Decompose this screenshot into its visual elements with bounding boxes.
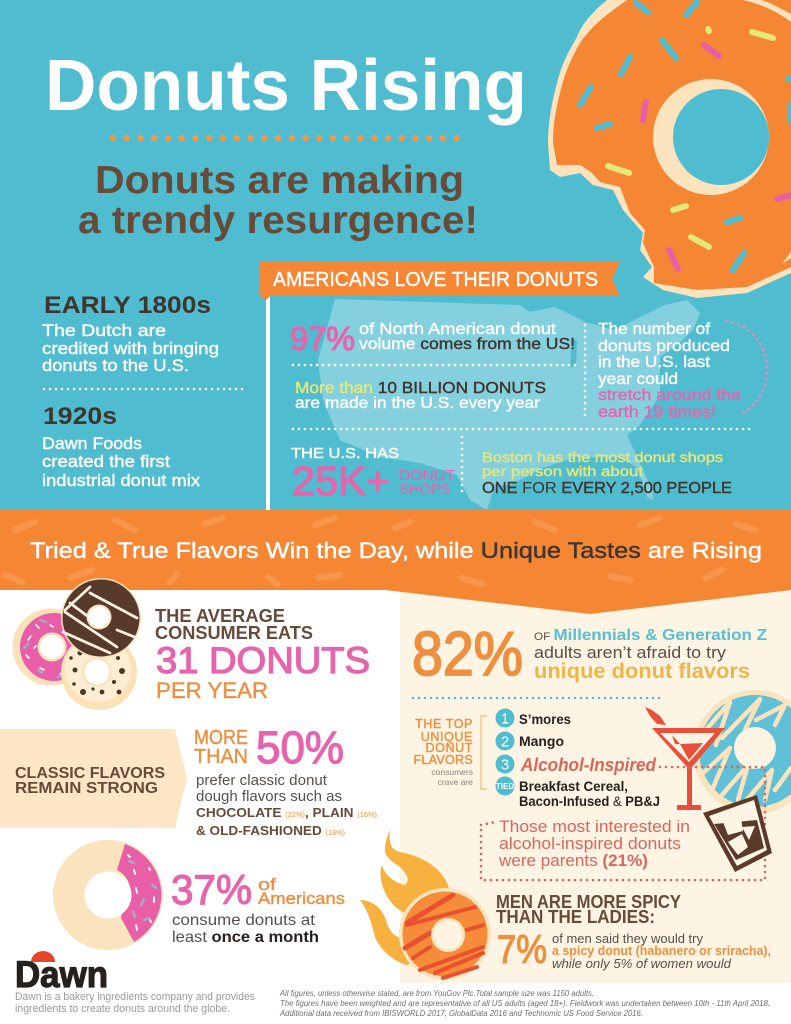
list: top unique donut flavors [413, 708, 660, 809]
icon: whiskey glass [703, 795, 772, 872]
text block: 1920s: 1920s [43, 403, 117, 430]
callout: alcohol-inspired parents: were parents (21%) [498, 851, 648, 870]
stat: more than 50 percent: prefer classic donut [196, 772, 328, 789]
stat: more than 50 percent [194, 722, 377, 838]
stat: average consumer eats 31 donuts: PER YEAR [156, 678, 268, 703]
text block: early 1800s: donuts to the U.S. [42, 357, 189, 375]
text block: 1920s: Dawn Foods [42, 435, 142, 453]
subtitle: a trendy resurgence! [78, 199, 478, 242]
arrow banner: classic flavors remain strong: CLASSIC FLAVORS [15, 765, 165, 782]
text block: Dawn description: Dawn is a bakery ingredients company and provides [15, 991, 255, 1003]
text block: early 1800s: credited with bringing [42, 340, 219, 358]
stat: 97 percent: of North American donut [359, 321, 557, 338]
stat: men are more spicy: MEN ARE MORE SPICY [496, 892, 681, 912]
panel: orange flavor banner [0, 510, 791, 614]
text block: 1920s: created the first [42, 453, 170, 471]
stat: men are more spicy [496, 892, 771, 972]
stat: 25K donut shops: DONUT [399, 468, 455, 484]
list label: DONUT [426, 741, 473, 755]
list label: FLAVORS [413, 753, 473, 767]
stat: 37 percent of Americans: Americans [258, 889, 345, 908]
stat: stretch around the earth [598, 321, 741, 421]
text block: 1920s [42, 403, 201, 490]
stat: 82 percent: unique donut flavors [534, 660, 750, 683]
text block: early 1800s [42, 292, 219, 375]
stat: men are more spicy: a spicy donut (habanero or sriracha), [552, 943, 771, 958]
stat: 82 percent: OF Millennials & Generation Z [534, 627, 767, 644]
arrow banner: classic flavors remain strong [0, 729, 187, 828]
stat: 10 billion donuts: are made in the U.S. every year [295, 395, 541, 412]
stat: more than 50 percent: MORE [194, 727, 248, 749]
stat: stretch around the earth: in the U.S. last [598, 354, 711, 371]
stat: men are more spicy: 7% [497, 928, 547, 972]
ribbon heading: Americans love their donuts [260, 262, 620, 300]
list item 3: Alcohol-Inspired [520, 755, 657, 775]
vertical white rule [266, 296, 270, 511]
callout: alcohol-inspired parents: Those most interested in [499, 817, 690, 836]
stat: more than 50 percent: & OLD-FASHIONED (13%) [196, 823, 345, 838]
stat: 97 percent: 97% [290, 320, 355, 357]
list label: UNIQUE [421, 730, 473, 744]
list label: consumers [431, 767, 473, 777]
cookie donut [61, 634, 137, 710]
icon: blue glazed donut [693, 690, 791, 814]
icon: three donuts [12, 578, 141, 710]
stat: Boston donut shops: per person with about [482, 464, 643, 479]
chart: 37 percent donut [53, 840, 163, 950]
icon: big orange sprinkled donut [548, 0, 791, 298]
stat: 10 billion donuts: More than 10 BILLION DONUTS [295, 380, 546, 397]
sprinkles [580, 2, 791, 270]
list item 1 [496, 708, 571, 728]
stat: stretch around the earth: donuts produced [598, 338, 730, 355]
callout: alcohol-inspired parents [481, 767, 765, 880]
chocolate donut [61, 578, 141, 658]
subtitle: Donuts are making [95, 159, 464, 202]
stat: stretch around the earth: year could [598, 371, 678, 388]
list label: crave are [438, 777, 473, 787]
stat: 97 percent [290, 320, 575, 357]
title: Donuts Rising [45, 46, 527, 126]
list label [413, 717, 473, 787]
stat: 82 percent [412, 620, 767, 689]
panel: donut history timeline [42, 292, 248, 490]
subtitle [78, 159, 478, 242]
stat: more than 50 percent: THAN [194, 746, 248, 768]
stat: more than 50 percent: dough flavors such as [196, 788, 342, 805]
text block: sources footnote: All figures, unless otherwise stated, are from YouGov Plc.Total sample size was 1150 adults. [279, 989, 594, 998]
icon: cocktail glass [645, 707, 725, 810]
text block: early 1800s: EARLY 1800s [44, 292, 211, 319]
panel: right cream background [400, 590, 791, 983]
icon: flaming donut [360, 830, 491, 980]
stat: 37 percent of Americans: of [258, 875, 276, 894]
stat: 25K donut shops: SHOPS [399, 482, 450, 498]
list item tied [496, 776, 660, 809]
stat: more than 50 percent: 50% [256, 722, 344, 773]
text block: 1920s: industrial donut mix [42, 472, 201, 490]
text block: sources footnote: The figures have been weighted and are representative of all US adults (aged 18+). Fieldwork was undertaken between 10th - 11th April 2018. [280, 999, 770, 1008]
panel: teal header background [0, 0, 791, 511]
list label: THE TOP [415, 717, 473, 731]
text block: early 1800s: The Dutch are [42, 322, 166, 340]
stat: Boston donut shops: ONE FOR EVERY 2,500 PEOPLE [482, 480, 732, 497]
stat: more than 50 percent: CHOCOLATE (22%), PLAIN (16%) [196, 805, 377, 820]
stat: 10 billion donuts [295, 380, 546, 412]
stat: average consumer eats 31 donuts: THE AVERAGE [155, 605, 285, 626]
stat: 37 percent of Americans [171, 866, 345, 946]
stat: average consumer eats 31 donuts: CONSUMER EATS [155, 622, 313, 643]
stat: 37 percent of Americans: least once a month [172, 929, 319, 946]
list item tied: TIED [496, 782, 514, 791]
stat: 37 percent of Americans: 37% [171, 866, 252, 913]
stat: stretch around the earth: earth 19 times! [598, 404, 716, 421]
stat: 82 percent: adults aren’t afraid to try [534, 644, 727, 662]
text block: Dawn description: ingredients to create donuts around the globe. [15, 1003, 230, 1015]
text block: sources footnote [279, 989, 770, 1018]
stat: 25K donut shops [291, 446, 455, 504]
stat: 37 percent of Americans: consume donuts at [172, 912, 316, 929]
list item 2: 2 [501, 734, 509, 750]
stat: Boston donut shops [482, 450, 732, 497]
callout: alcohol-inspired parents: alcohol-inspired donuts [499, 834, 681, 853]
stat: 25K donut shops: THE U.S. HAS [291, 446, 399, 462]
list item 1: S’mores [519, 712, 571, 727]
text block: Dawn description [15, 991, 255, 1015]
list item 1: 1 [501, 710, 509, 728]
list item 2 [496, 732, 564, 750]
list item tied: Bacon-Infused & PB&J [519, 794, 660, 809]
stat: men are more spicy: of men said they would try [552, 931, 703, 946]
stat: 97 percent: volume comes from the US! [359, 336, 575, 353]
stat: stretch around the earth: stretch around the [598, 387, 741, 404]
map of the United States [318, 299, 700, 510]
list item 3: 3 [501, 756, 509, 774]
stat: 82 percent: 82% [412, 620, 523, 689]
list item tied: Breakfast Cereal, [519, 779, 628, 794]
list item 2: Mango [519, 734, 564, 749]
logo: Dawn: Dawn [15, 954, 108, 995]
pink donut [12, 608, 90, 686]
text block: sources footnote: Additional data received from IBISWORLD 2017, GlobalData 2016 and Technomic US Food Service 2016. [279, 1009, 643, 1018]
stat: 25K donut shops: 25K+ [292, 458, 390, 504]
stat: average consumer eats 31 donuts [155, 605, 370, 703]
stat: men are more spicy: THAN THE LADIES: [496, 907, 655, 927]
stat: average consumer eats 31 donuts: 31 DONUTS [156, 640, 370, 681]
banner heading: Tried & True Flavors Win the Day, while Unique Tastes are Rising [30, 538, 762, 563]
stat: men are more spicy: while only 5% of women would [552, 956, 732, 971]
stat: stretch around the earth: The number of [598, 321, 711, 338]
stat: Boston donut shops: Boston has the most donut shops [482, 450, 723, 465]
arrow banner: classic flavors remain strong: REMAIN STRONG [15, 780, 158, 797]
ribbon heading: Americans love their donuts: AMERICANS LOVE THEIR DONUTS [273, 269, 598, 291]
